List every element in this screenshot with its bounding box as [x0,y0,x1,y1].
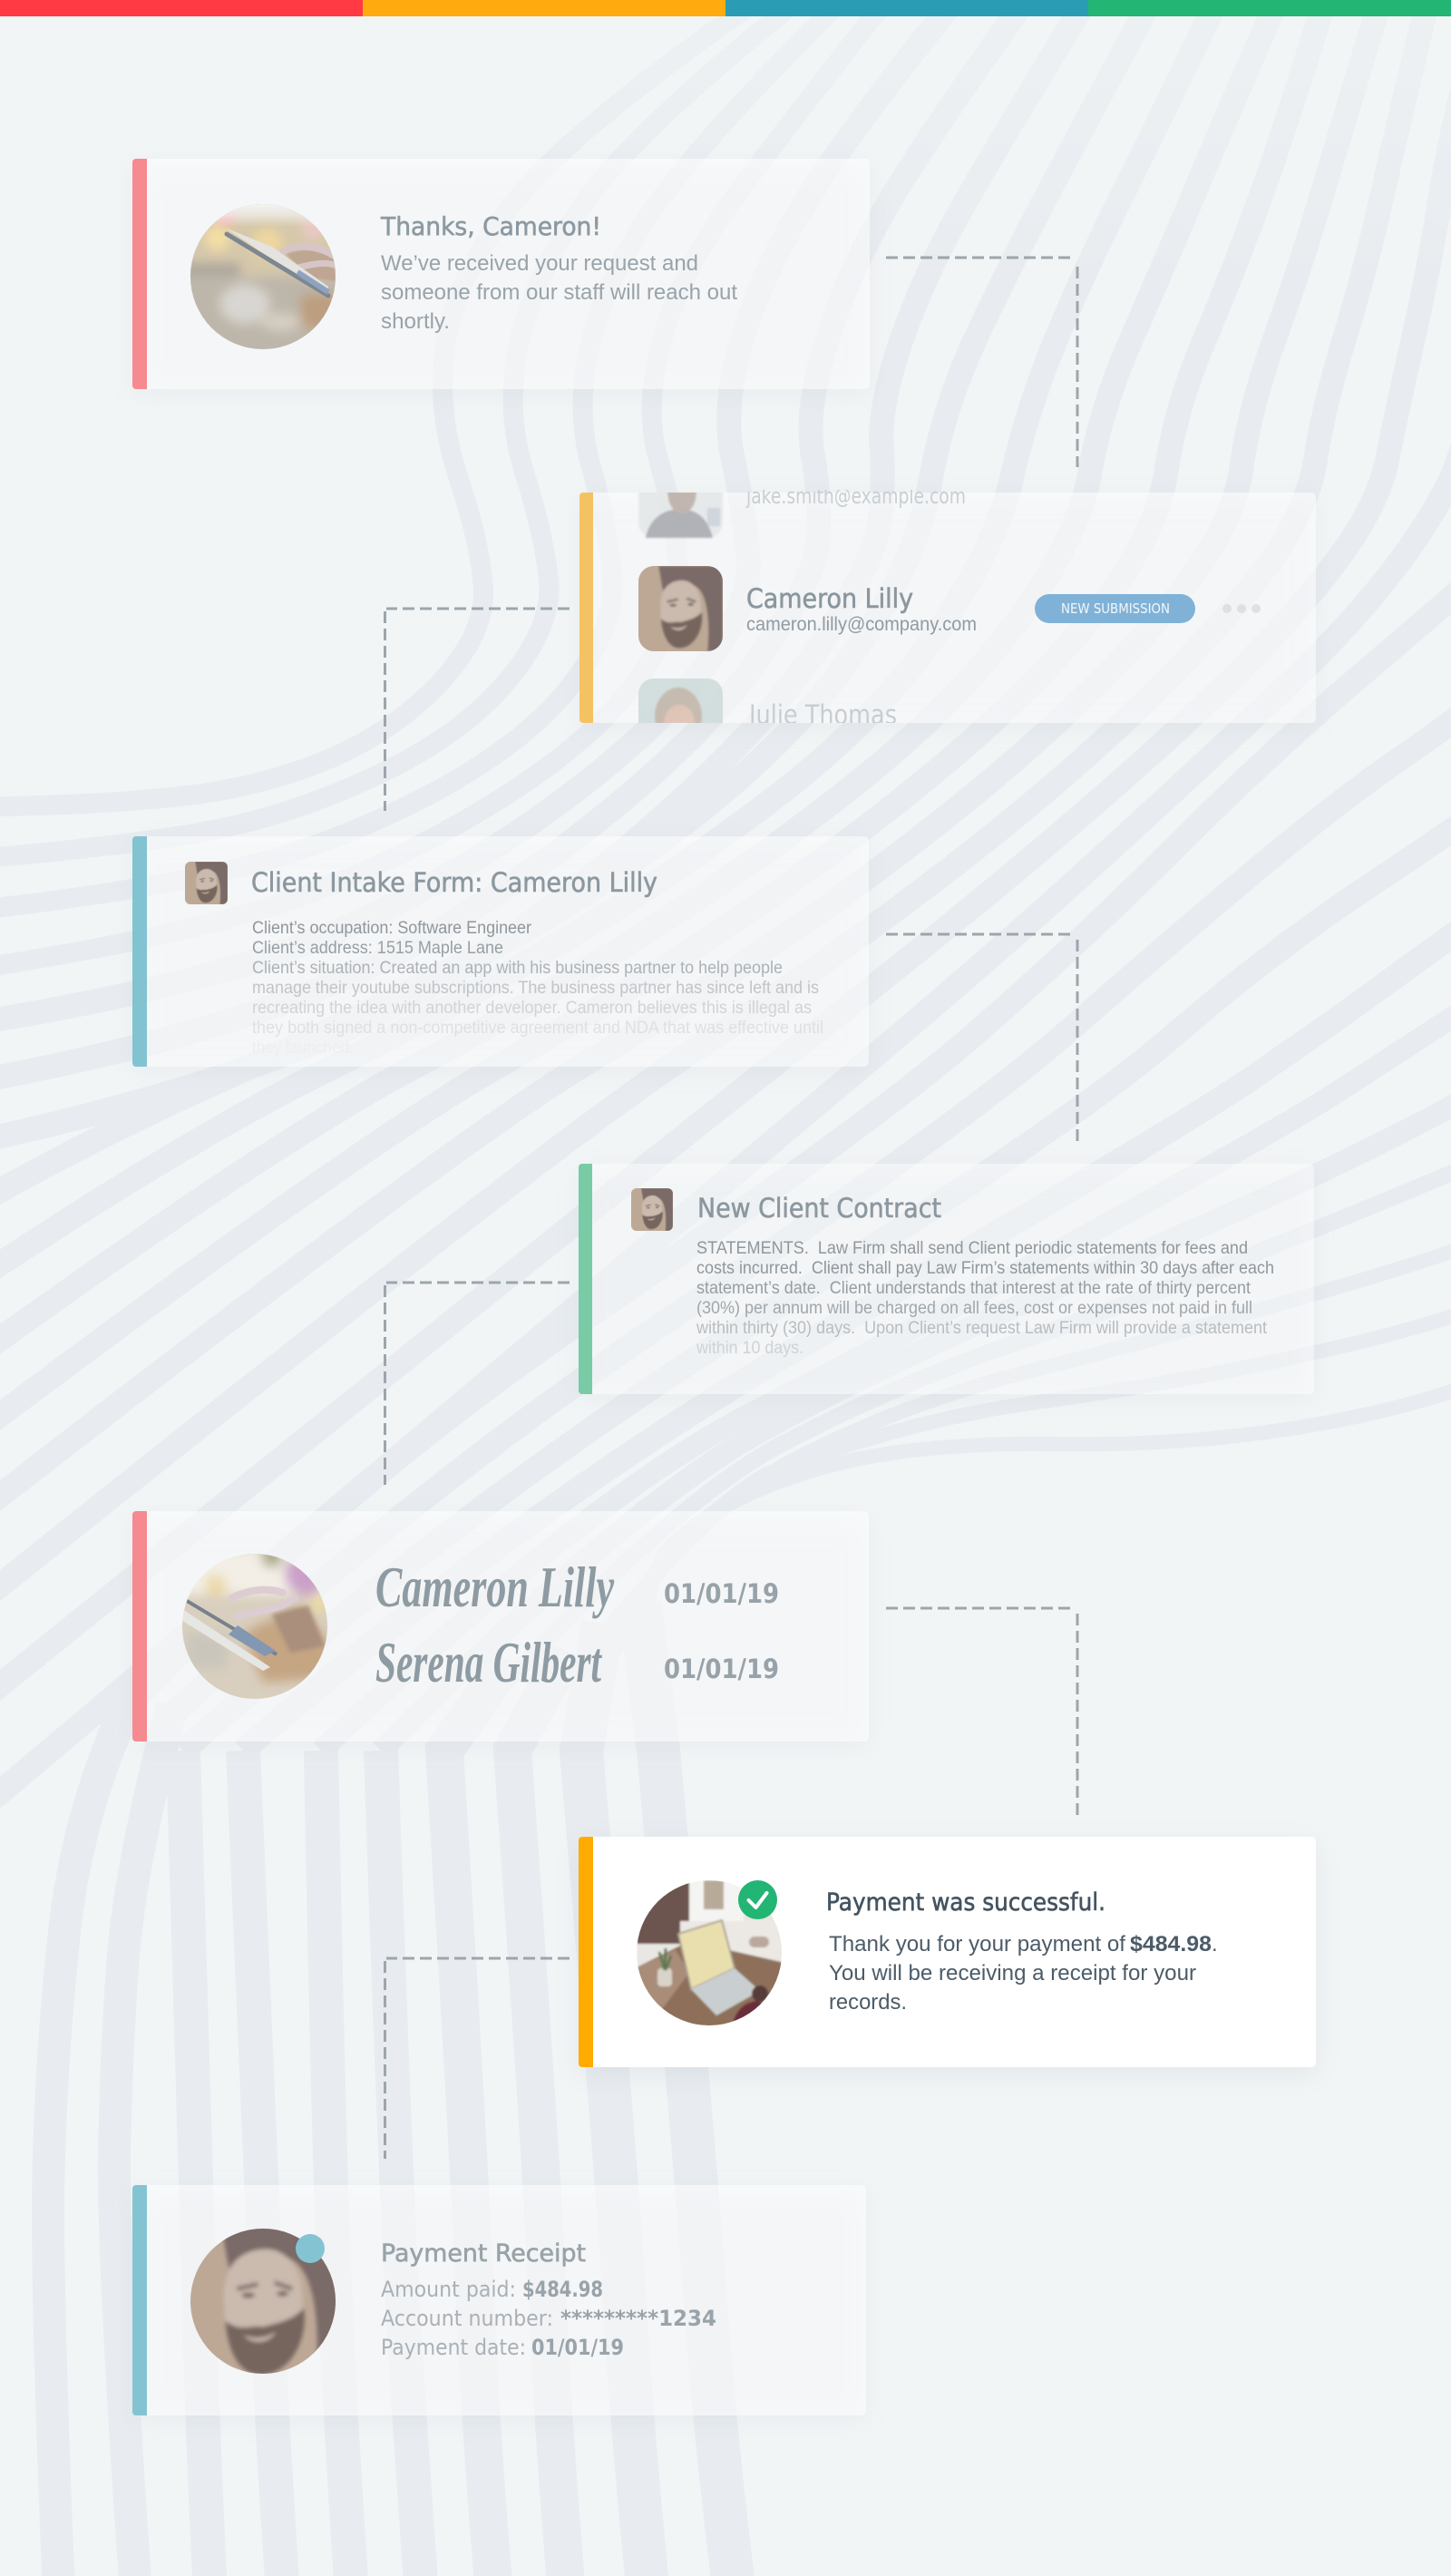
contract text: STATEMENTS. Law Firm shall send Client periodic statements for fees and [696,1239,1248,1258]
connector 1 [886,258,1077,467]
heading: Client Intake Form: Cameron Lilly [251,867,657,898]
panel: confirmation message [132,159,870,395]
badge: new submission: NEW SUBMISSION [1061,600,1170,617]
confirmation text [829,1932,1218,2015]
connector 2 [385,609,570,811]
form text: recreating the idea with another developer. Cameron believes this is illegal as [252,999,812,1018]
connector 4 [385,1283,570,1485]
photo: client thumbnail [631,1188,673,1231]
icon: green check badge [738,1880,777,1919]
connector 3 [886,934,1077,1142]
heading: Payment was successful. [826,1888,1105,1917]
form text: Client’s address: 1515 Maple Lane [252,939,503,958]
panel: submissions list [579,490,1316,723]
form text [252,919,823,1058]
signature: cameron: Cameron Lilly [375,1555,614,1619]
photo: jake avatar [638,493,723,539]
contact email: cameron: cameron.lilly@company.com [746,614,977,635]
confirmation text: Thank you for your payment of [829,1932,1125,1956]
heading: Payment Receipt [381,2239,586,2268]
receipt details: Account number: [381,2306,553,2331]
message text: shortly. [381,309,450,334]
photo: phone in hand [186,200,340,349]
message text: someone from our staff will reach out [381,280,737,305]
contract text: (30%) per annum will be charged on all fees, cost or expenses not paid in full [696,1299,1252,1318]
contract text [696,1239,1274,1358]
receipt details: *********1234 [560,2306,716,2331]
message text: We’ve received your request and [381,251,698,276]
contract text: statement’s date. Client understands that interest at the rate of thirty percent [696,1279,1251,1298]
contract text: costs incurred. Client shall pay Law Firm’s statements within 30 days after each [696,1259,1274,1278]
heading: New Client Contract [697,1193,941,1224]
photo: tablet in hand [180,1546,328,1699]
form text: Client’s situation: Created an app with his business partner to help people [252,959,783,978]
form text: manage their youtube subscriptions. The business partner has since left and is [252,979,819,998]
date: serena: 01/01/19 [664,1654,779,1684]
panel: new client contract [579,1164,1314,1400]
receipt details: $484.98 [522,2277,603,2302]
heading: Thanks, Cameron! [380,211,601,241]
top colour bar [0,0,1451,16]
receipt details: 01/01/19 [531,2335,624,2360]
photo: client thumbnail [185,862,228,904]
photo: laptop on desk [635,1880,789,2032]
contact name: cameron: Cameron Lilly [746,583,913,614]
form text: they launched. [252,1039,354,1058]
signature: serena: Serena Gilbert [375,1630,602,1694]
contract text: within 10 days. [696,1339,803,1358]
form text: they both signed a non-competitive agreement and NDA that was effective until [252,1019,823,1038]
form text: Client’s occupation: Software Engineer [252,919,532,938]
icon: more dots [1222,604,1261,613]
photo: julie avatar [638,678,723,723]
contact email: jake: jake.smith@example.com [745,483,966,509]
receipt details [381,2277,716,2360]
receipt details: Amount paid: [381,2277,516,2302]
icon: teal status dot [296,2234,325,2263]
confirmation text: You will be receiving a receipt for your [829,1961,1196,1986]
date: cameron: 01/01/19 [664,1578,779,1609]
contract text: within thirty (30) days. Upon Client’s request Law Firm will provide a statement [696,1319,1268,1338]
receipt details: Payment date: [381,2335,526,2360]
panel: client intake form [132,836,869,1072]
panel: payment receipt [132,2185,736,2415]
contact name: julie: Julie Thomas [747,699,897,730]
message text [381,251,737,334]
photo: cameron avatar [638,566,723,651]
confirmation text: . [1212,1932,1218,1956]
connector 6 [385,1958,570,2159]
connector 5 [886,1608,1077,1816]
photo: client portrait [190,2229,336,2374]
badge: new submission [1035,594,1195,623]
confirmation text: records. [829,1990,907,2015]
panel: signatures [132,1511,778,1742]
panel: payment successful [579,1837,1316,2074]
confirmation text: $484.98 [1130,1932,1212,1956]
